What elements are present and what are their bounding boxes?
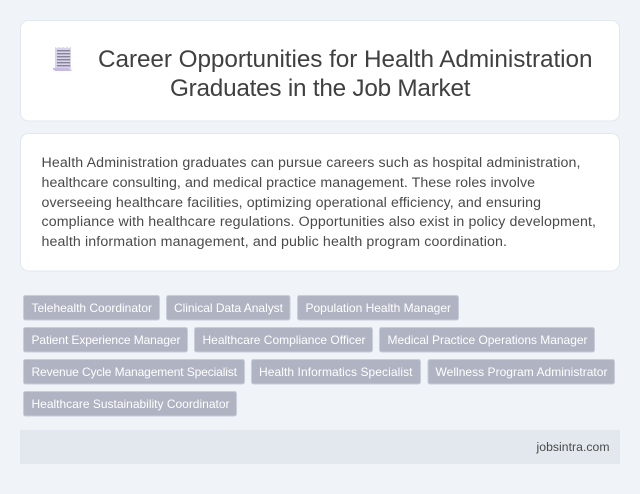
tag	[252, 360, 420, 384]
tag: Health Informatics Specialist	[259, 365, 413, 379]
tag: Wellness Program Administrator	[436, 365, 608, 379]
tag: Clinical Data Analyst	[174, 301, 284, 315]
tag	[166, 296, 290, 320]
description text	[42, 155, 596, 250]
description text: health information management, and public health program coordination.	[42, 234, 507, 250]
title: Graduates in the Job Market	[170, 75, 471, 102]
tag	[194, 328, 372, 352]
footer bar	[20, 430, 620, 464]
tag	[380, 328, 594, 352]
title: Career Opportunities for Health Administration	[98, 46, 592, 73]
description text: compliance with healthcare regulations. Opportunities also exist in policy development,	[42, 214, 596, 230]
tag	[298, 296, 458, 320]
panel: job title tags	[24, 296, 614, 416]
title	[98, 46, 592, 102]
tag	[24, 296, 160, 320]
tag: Patient Experience Manager	[32, 333, 180, 347]
tag	[428, 360, 614, 384]
description text: healthcare consulting, and medical practice management. These roles involve	[42, 175, 535, 191]
tag: Population Health Manager	[306, 301, 451, 315]
tag: Healthcare Sustainability Coordinator	[32, 397, 230, 411]
panel: description card	[20, 134, 620, 271]
tag: Medical Practice Operations Manager	[388, 333, 588, 347]
footer source label: jobsintra.com	[536, 440, 610, 454]
tag: Healthcare Compliance Officer	[202, 333, 366, 347]
tag: Telehealth Coordinator	[32, 301, 152, 315]
panel: header card	[20, 20, 620, 121]
tag	[24, 360, 244, 384]
tag	[24, 392, 236, 416]
description text: overseeing healthcare facilities, optimizing operational efficiency, and ensuring	[42, 195, 541, 211]
description text: Health Administration graduates can pursue careers such as hospital administration,	[42, 155, 580, 171]
tag	[24, 328, 188, 352]
tag: Revenue Cycle Management Specialist	[32, 365, 238, 379]
icon: document scroll	[53, 47, 72, 71]
